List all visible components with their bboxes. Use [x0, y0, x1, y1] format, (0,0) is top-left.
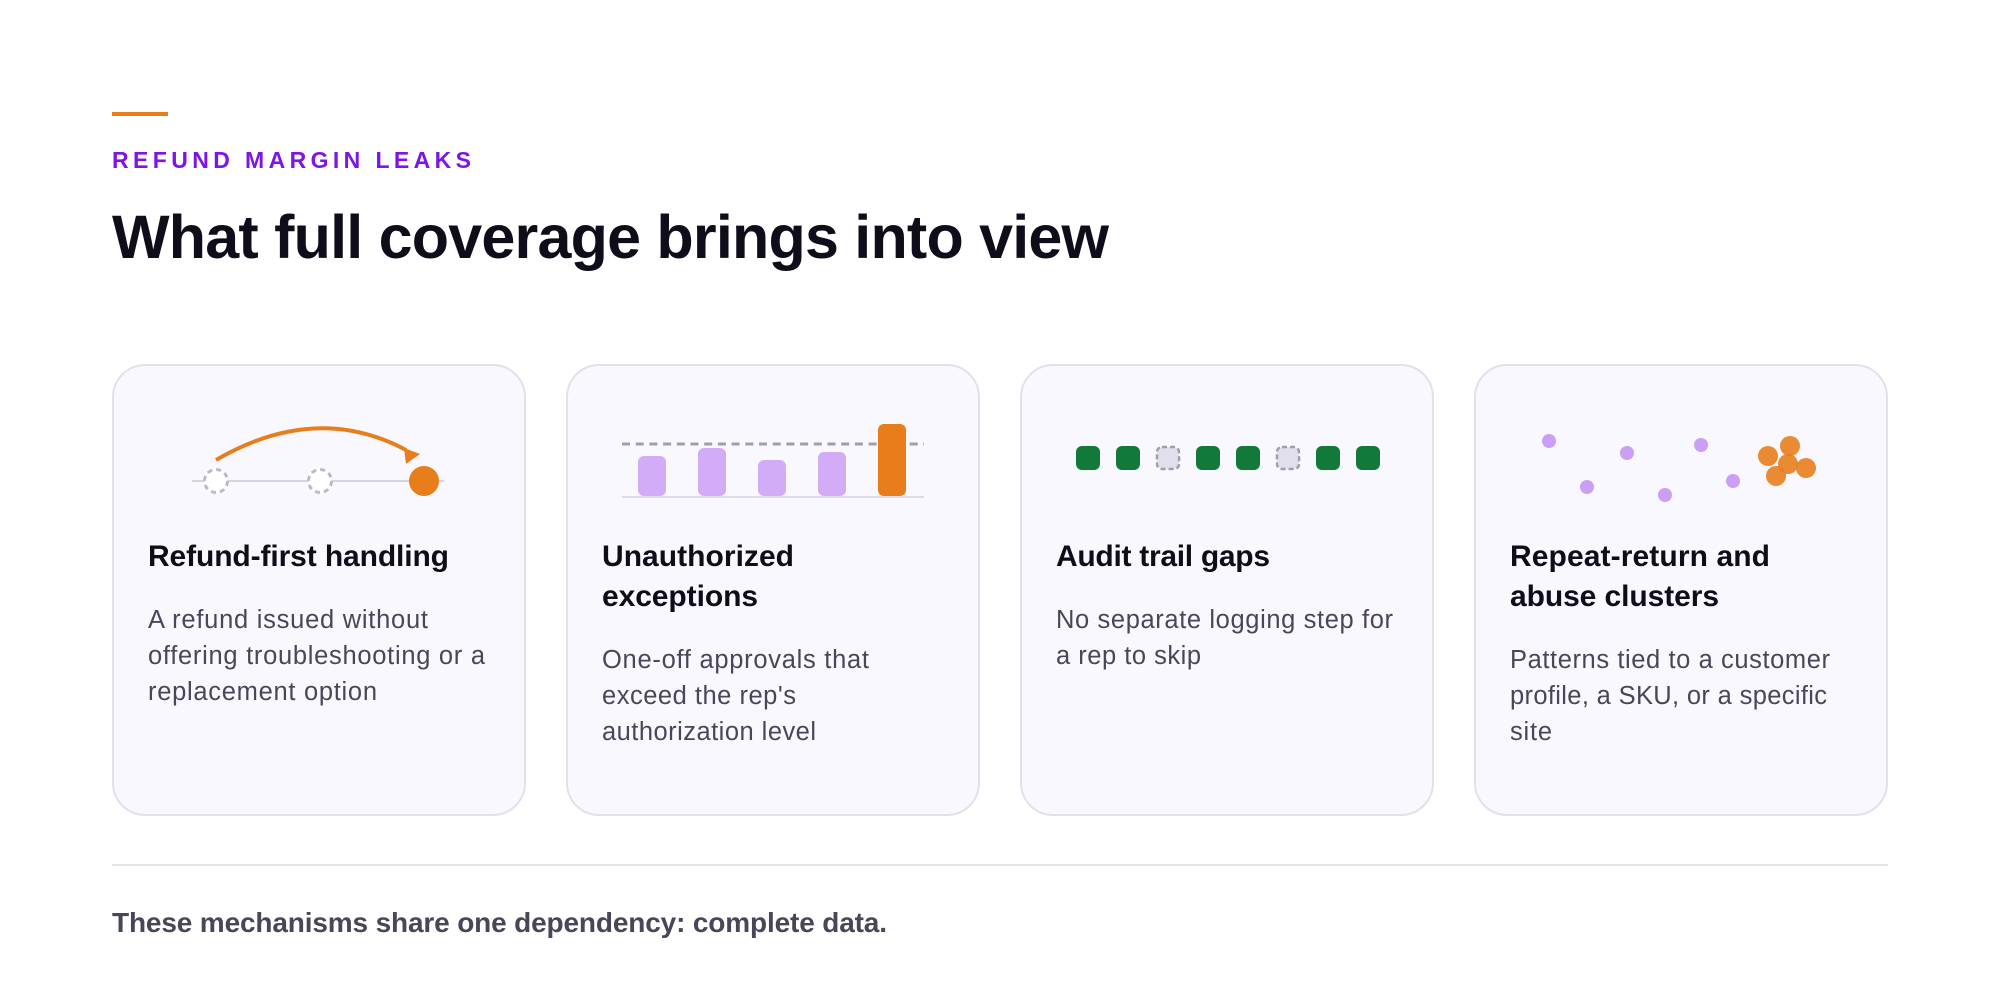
card body: One-off approvals that: [602, 646, 869, 674]
card heading: [1510, 540, 1770, 613]
card body: a rep to skip: [1056, 642, 1201, 670]
card body: offering troubleshooting or a: [148, 642, 486, 670]
card heading: abuse clusters: [1510, 580, 1719, 613]
card body: profile, a SKU, or a specific: [1510, 682, 1827, 710]
card body: replacement option: [148, 678, 377, 706]
card body: authorization level: [602, 718, 816, 746]
card heading: exceptions: [602, 580, 758, 613]
icon: log squares with gaps: [1076, 446, 1380, 470]
card body: [602, 646, 869, 746]
card body: site: [1510, 718, 1552, 746]
card body: A refund issued without: [148, 606, 428, 634]
card body: Patterns tied to a customer: [1510, 646, 1830, 674]
eyebrow: REFUND MARGIN LEAKS: [112, 147, 471, 173]
icon: bars over threshold: [622, 424, 924, 497]
card body: [148, 606, 486, 706]
icon: skipped steps arc: [192, 428, 444, 496]
card body: No separate logging step for: [1056, 606, 1394, 634]
panel: refund-first handling: [113, 365, 525, 815]
card heading: Audit trail gaps: [1056, 540, 1270, 573]
panel: unauthorized exceptions: [567, 365, 979, 815]
card heading: Repeat-return and: [1510, 540, 1770, 573]
card heading: Unauthorized: [602, 540, 794, 573]
panel: repeat-return and abuse clusters: [1475, 365, 1887, 815]
card heading: [602, 540, 794, 613]
panel: audit trail gaps: [1021, 365, 1433, 815]
card heading: Refund-first handling: [148, 540, 449, 573]
icon: scattered dots and cluster: [1542, 434, 1816, 502]
card body: [1510, 646, 1830, 746]
footer takeaway: These mechanisms share one dependency: complete data.: [112, 907, 887, 938]
card body: [1056, 606, 1394, 670]
card body: exceed the rep's: [602, 682, 796, 710]
accent rule: [112, 112, 168, 116]
title: What full coverage brings into view: [112, 203, 1110, 271]
